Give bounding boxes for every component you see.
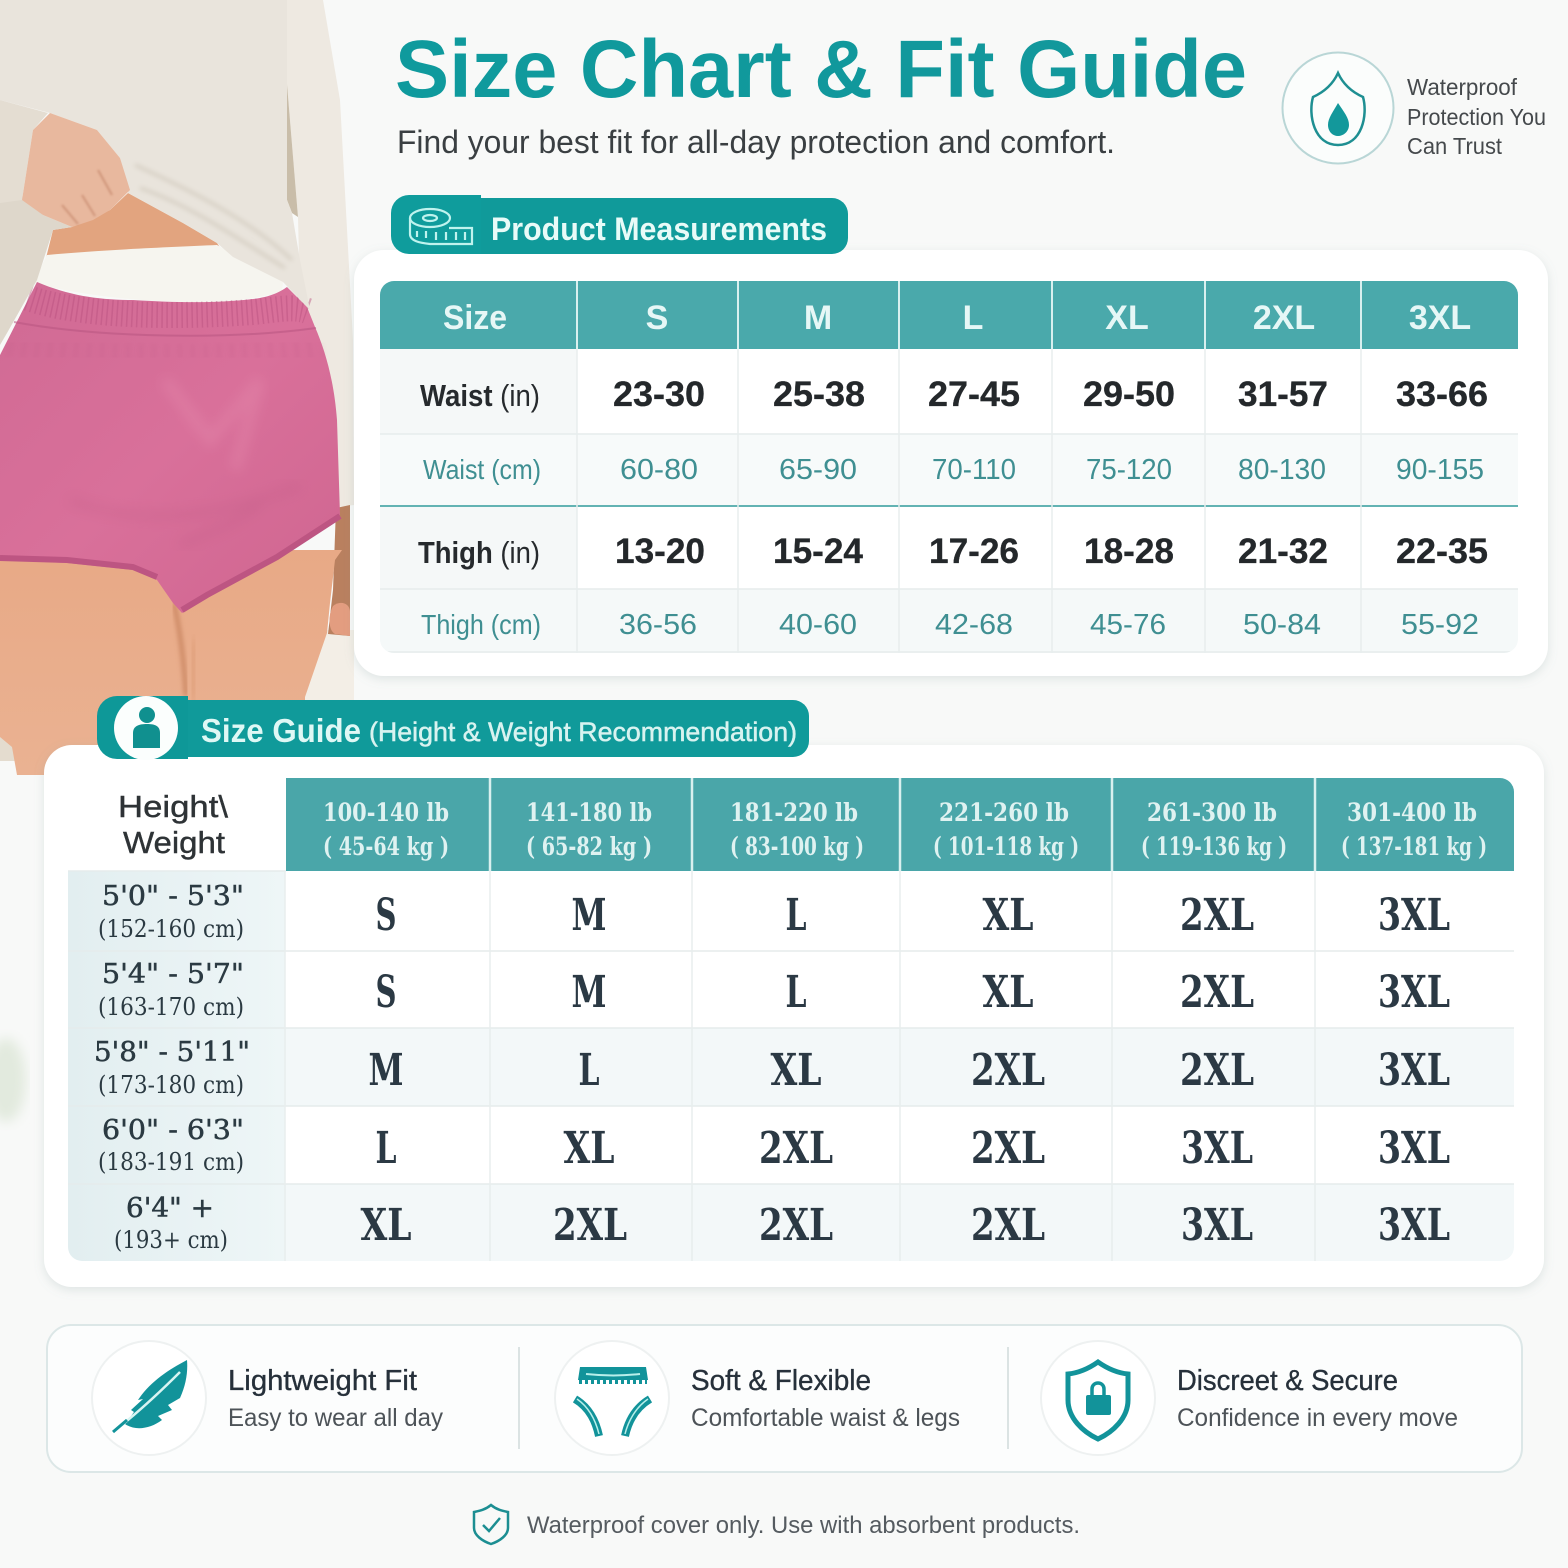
benefit: discreet and secure: Confidence in every move: [1177, 1404, 1458, 1432]
legs: [0, 550, 342, 775]
row: waist inches: Waist (in): [420, 378, 540, 413]
row: waist inches: [420, 375, 1488, 414]
height labels: (152-160 cm): [98, 915, 244, 943]
row: waist inches: 25-38: [773, 375, 865, 414]
weight headers: ( 45-64 kg ): [323, 832, 449, 861]
badge text: [1407, 74, 1546, 159]
row: waist inches: 31-57: [1238, 375, 1328, 414]
size row 5: 3XL: [1378, 1200, 1450, 1251]
left cardigan panel: [0, 196, 72, 345]
shadow gap between shirt and cardigan: [278, 60, 298, 217]
size row 2: XL: [982, 967, 1034, 1018]
size row 4: XL: [564, 1123, 614, 1174]
weight headers: ( 101-118 kg ): [933, 832, 1079, 861]
size row 5: 2XL: [553, 1200, 627, 1251]
row: thigh inches: 17-26: [929, 532, 1019, 571]
row: waist centimetres: 80-130: [1238, 454, 1326, 486]
size row 1: L: [786, 890, 806, 941]
size row 4: 3XL: [1181, 1123, 1253, 1174]
corner label: Height\: [118, 789, 228, 824]
header row: Size: [443, 299, 507, 337]
badge text: Waterproof: [1407, 74, 1518, 100]
weight headers: 100-140 lb: [323, 798, 449, 827]
fabric shadows: [70, 485, 300, 545]
row: thigh centimetres: [421, 609, 1479, 641]
heading: size guide: Size Guide: [201, 712, 361, 749]
size row 1: XL: [982, 890, 1034, 941]
height labels: 6'4" +: [126, 1193, 214, 1224]
row: thigh inches: Thigh (in): [418, 535, 540, 570]
row: thigh centimetres: 50-84: [1243, 609, 1321, 641]
size row 2: [376, 967, 1450, 1018]
weight headers: 141-180 lb: [526, 798, 652, 827]
badge text: Can Trust: [1407, 133, 1503, 159]
icon: person: [114, 696, 178, 760]
row: waist inches: 23-30: [613, 375, 705, 414]
waistband ribbing: [28, 298, 310, 315]
shirt: [0, 0, 310, 310]
weight headers: 221-260 lb: [939, 798, 1069, 827]
size row 3: [368, 1045, 1450, 1096]
fabric highlights: [165, 380, 260, 470]
size row 3: 2XL: [1180, 1045, 1254, 1096]
size row 1: M: [572, 890, 606, 941]
size row 4: [376, 1123, 1450, 1174]
row: thigh inches: 22-35: [1396, 532, 1488, 571]
weight headers: 301-400 lb: [1347, 798, 1477, 827]
row: waist centimetres: 65-90: [779, 454, 857, 486]
size row 4: 2XL: [971, 1123, 1045, 1174]
size row 3: 2XL: [971, 1045, 1045, 1096]
row: thigh centimetres: 40-60: [779, 609, 857, 641]
backdrop behind left thigh: [0, 735, 24, 761]
white absorbent liner: [33, 245, 283, 302]
header row: 3XL: [1409, 299, 1471, 337]
header row: XL: [1105, 299, 1149, 337]
height labels: (183-191 cm): [98, 1148, 244, 1176]
height labels: (173-180 cm): [98, 1071, 244, 1099]
header row: 2XL: [1253, 299, 1315, 337]
finger lines: [62, 170, 112, 224]
row: thigh centimetres: 42-68: [935, 609, 1013, 641]
row: thigh inches: 13-20: [615, 532, 705, 571]
size row 2: 3XL: [1378, 967, 1450, 1018]
icon: shield with lock: [1041, 1341, 1155, 1455]
leg hem: [0, 516, 340, 610]
size row 2: L: [786, 967, 806, 1018]
waistband seam: [14, 322, 316, 336]
right fingers: [329, 603, 350, 636]
size row 1: 3XL: [1378, 890, 1450, 941]
height labels: 6'0" - 6'3": [102, 1115, 244, 1146]
corner label: Weight: [123, 825, 225, 860]
benefit: lightweight fit: Easy to wear all day: [228, 1404, 443, 1432]
right hand behind thigh: [328, 505, 350, 636]
row: thigh inches: 15-24: [773, 532, 864, 571]
icon: feather: [92, 1341, 206, 1455]
benefit: lightweight fit: [92, 1341, 443, 1455]
row: thigh centimetres: Thigh (cm): [421, 609, 541, 640]
left cardigan sleeve: [0, 100, 48, 203]
row: waist centimetres: 60-80: [620, 454, 698, 486]
height labels: (193+ cm): [114, 1226, 228, 1254]
header row: S: [646, 299, 668, 337]
weight headers: 261-300 lb: [1147, 798, 1277, 827]
size row 3: 3XL: [1378, 1045, 1450, 1096]
strip card: [47, 1325, 1522, 1472]
height labels: 5'4" - 5'7": [102, 959, 244, 990]
backdrop behind right thigh: [300, 630, 354, 700]
icon: waterproof shield with drop: [1282, 52, 1394, 164]
row: waist centimetres: Waist (cm): [423, 454, 541, 485]
row: thigh centimetres: 55-92: [1401, 609, 1479, 641]
row: waist inches: 27-45: [928, 375, 1020, 414]
heading: product measurements: [391, 195, 848, 254]
panel: benefits strip: [47, 1325, 1522, 1472]
size row 5: XL: [360, 1200, 412, 1251]
footnote: [474, 1505, 1080, 1544]
hand holding shirt: [22, 113, 130, 227]
row: thigh inches: [418, 532, 1488, 571]
header row: M: [804, 299, 832, 337]
gathers under waistband: [10, 344, 322, 356]
panel card: [44, 745, 1544, 1287]
header row: [443, 299, 1471, 337]
belly skin: [45, 193, 225, 262]
height labels: (163-170 cm): [98, 993, 244, 1021]
row: waist inches: 33-66: [1396, 375, 1488, 414]
icon: briefs outline: [555, 1341, 669, 1455]
benefit: soft and flexible: Soft & Flexible: [691, 1365, 871, 1397]
size row 2: M: [572, 967, 606, 1018]
size row 5: 3XL: [1181, 1200, 1253, 1251]
benefit: discreet and secure: [1041, 1341, 1458, 1455]
size row 4: 3XL: [1378, 1123, 1450, 1174]
height labels: 5'8" - 5'11": [94, 1037, 250, 1068]
panel: size guide: [44, 745, 1544, 1287]
height labels: [94, 881, 250, 1254]
icon: measuring tape: [410, 209, 472, 244]
cardigan on the right: [280, 0, 354, 508]
size row 4: L: [376, 1123, 396, 1174]
weight headers: ( 65-82 kg ): [526, 832, 652, 861]
pink briefs body: [0, 282, 340, 613]
row: thigh inches: 18-28: [1084, 532, 1174, 571]
photo: model wearing pink waterproof briefs: [0, 0, 354, 775]
weight headers: ( 83-100 kg ): [730, 832, 864, 861]
icon: shield check: [474, 1505, 508, 1544]
benefit: discreet and secure: Discreet & Secure: [1177, 1365, 1398, 1397]
panel card: [354, 250, 1548, 676]
size row 2: 2XL: [1180, 967, 1254, 1018]
size row 4: 2XL: [759, 1123, 833, 1174]
decorative leaf in lower left: [0, 1038, 26, 1122]
row: thigh centimetres: 36-56: [619, 609, 697, 641]
size row 2: S: [376, 967, 396, 1018]
heading: product measurements: Product Measurements: [491, 211, 827, 247]
row: thigh centimetres: 45-76: [1090, 609, 1166, 641]
gap between thighs: [174, 603, 186, 696]
row: waist centimetres: 75-120: [1086, 454, 1172, 486]
row: waist inches: 29-50: [1083, 375, 1175, 414]
size row 3: L: [578, 1045, 600, 1096]
size row 1: [376, 890, 1450, 941]
size row 1: 2XL: [1180, 890, 1254, 941]
measurements table: [380, 281, 1518, 653]
size row 3: XL: [770, 1045, 822, 1096]
footnote: Waterproof cover only. Use with absorbent products.: [527, 1512, 1080, 1539]
size guide table background: [68, 778, 1514, 1261]
row: waist centimetres: [423, 454, 1484, 486]
size row 5: 2XL: [971, 1200, 1045, 1251]
row: waist centimetres: 90-155: [1396, 454, 1484, 486]
benefit: lightweight fit: Lightweight Fit: [228, 1365, 417, 1397]
size row 1: S: [376, 890, 396, 941]
size row 5: 2XL: [759, 1200, 833, 1251]
title: Size Chart & Fit Guide: [395, 24, 1247, 115]
weight headers: ( 119-136 kg ): [1141, 832, 1287, 861]
corner label: [118, 789, 228, 860]
panel: product measurements: [354, 250, 1548, 676]
heading: size guide: [97, 696, 809, 760]
row: waist centimetres: 70-110: [932, 454, 1016, 486]
subtitle: Find your best fit for all-day protection and comfort.: [397, 124, 1115, 160]
row: thigh inches: 21-32: [1238, 532, 1328, 571]
shadow on the inner right thigh: [192, 640, 195, 700]
benefit: soft and flexible: [555, 1341, 960, 1455]
height labels: 5'0" - 5'3": [102, 881, 244, 912]
weight headers: 181-220 lb: [730, 798, 858, 827]
weight headers: ( 137-181 kg ): [1341, 832, 1487, 861]
badge text: Protection You: [1407, 104, 1546, 130]
header row: L: [963, 299, 983, 337]
size row 5: [360, 1200, 1450, 1251]
size row 3: M: [368, 1045, 404, 1096]
waterproof badge: [1282, 52, 1546, 164]
heading: size guide: (Height & Weight Recommendation): [369, 717, 797, 747]
shirt hem fold shadows: [135, 165, 292, 268]
weight headers: [323, 798, 1487, 861]
benefit: soft and flexible: Comfortable waist & legs: [691, 1404, 960, 1432]
